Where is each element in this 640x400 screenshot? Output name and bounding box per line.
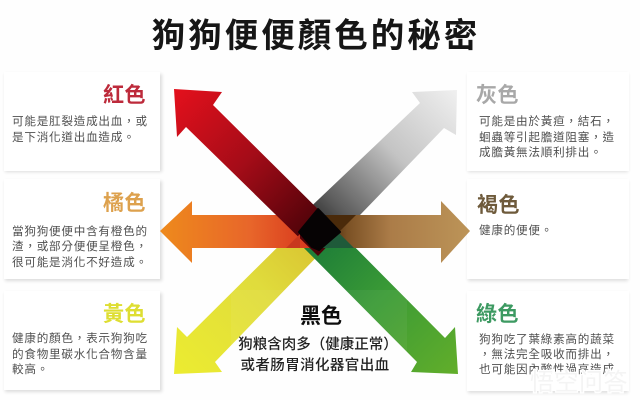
text: yellow description: 的食物里碳水化合物含量: [12, 347, 148, 361]
arrow: yellow: [174, 217, 333, 374]
panel: green: [467, 291, 629, 393]
heading: orange: 橘色: [103, 192, 146, 215]
text: gray description: 成膽黃無法順利排出。: [479, 145, 602, 159]
heading: green: 綠色: [476, 303, 519, 326]
text: gray description: 可能是由於黃疸，結石，: [479, 114, 615, 128]
center: black intersection: [299, 209, 340, 250]
text: brown description: 健康的便便。: [479, 223, 553, 237]
watermark: 悟空问答: [530, 369, 628, 396]
heading: yellow: 黃色: [103, 303, 146, 326]
text: black line 1: 狗粮含肉多（健康正常）: [238, 335, 398, 353]
text: orange description: 很可能是消化不好造成。: [12, 255, 148, 269]
title: 狗狗便便顏色的秘密: [152, 18, 480, 55]
text: yellow description: 健康的顏色，表示狗狗吃: [12, 331, 148, 345]
text: gray description: 蛔蟲等引起膽道阻塞，造: [479, 130, 615, 144]
text: green description: ，無法完全吸收而排出，: [479, 347, 615, 361]
heading: brown: 褐色: [477, 194, 520, 217]
text: green description: 也可能因內酸性過高造成: [479, 362, 615, 376]
arrow: brown: [318, 201, 470, 263]
heading: black: 黑色: [300, 305, 342, 328]
arrow: gray: [300, 90, 457, 245]
panel: brown: [467, 179, 629, 281]
text: orange description: 渣，或部分便便呈橙色，: [12, 239, 148, 253]
arrow: red: [174, 89, 341, 256]
text: red description: 是下消化道出血造成。: [12, 130, 135, 144]
text: orange description: 當狗狗便便中含有橙色的: [12, 224, 148, 238]
text: green description: 狗狗吃了葉綠素高的蔬菜: [479, 332, 615, 346]
arrow: orange: [160, 201, 318, 263]
text: black line 2: 或者肠胃消化器官出血: [240, 357, 390, 374]
arrow: green: [296, 214, 458, 374]
heading: red: 紅色: [103, 84, 146, 107]
text: red description: 可能是肛裂造成出血，或: [12, 114, 148, 128]
text: yellow description: 較高。: [12, 362, 49, 376]
heading: gray: 灰色: [476, 84, 519, 107]
panel: yellow: [4, 291, 162, 392]
panel: gray: [467, 72, 629, 172]
center overlap: brown and green tints: [286, 215, 356, 248]
panel: orange: [4, 179, 162, 281]
panel: red: [4, 72, 162, 172]
panel: black: [231, 290, 407, 398]
